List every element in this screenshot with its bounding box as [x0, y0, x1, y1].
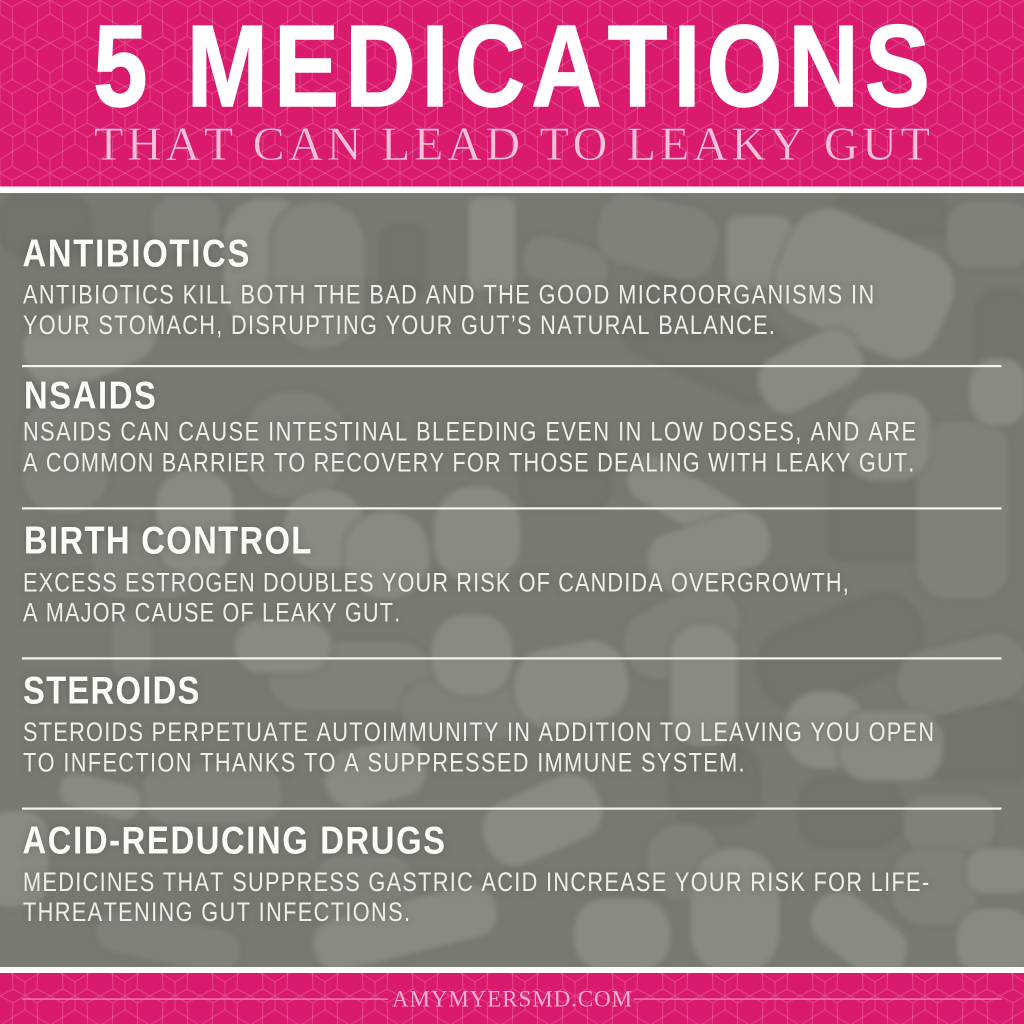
body: nsaids: NSAIDS CAN CAUSE INTESTINAL BLEEDING EVEN IN LOW DOSES, AND ARE [23, 418, 916, 447]
body: birth control: A MAJOR CAUSE OF LEAKY GUT. [23, 599, 400, 628]
heading: antibiotics: ANTIBIOTICS [23, 231, 249, 275]
header banner [0, 0, 1024, 186]
heading: nsaids: NSAIDS [24, 373, 156, 417]
body: antibiotics [23, 280, 874, 341]
body: steroids [23, 718, 934, 778]
section: antibiotics [23, 231, 874, 341]
body: nsaids [23, 418, 916, 478]
subtitle: THAT CAN LEAD TO LEAKY GUT [94, 118, 930, 171]
body: antibiotics: YOUR STOMACH, DISRUPTING YOUR GUT’S NATURAL BALANCE. [23, 311, 775, 341]
body: acid-reducing drugs: THREATENING GUT INFECTIONS. [23, 898, 410, 928]
body: birth control [23, 569, 849, 628]
section: steroids [23, 668, 934, 778]
heading: birth control: BIRTH CONTROL [24, 518, 311, 562]
section: nsaids [23, 373, 916, 478]
body: steroids: TO INFECTION THANKS TO A SUPPRESSED IMMUNE SYSTEM. [23, 749, 745, 778]
heading: steroids: STEROIDS [23, 668, 199, 712]
body: steroids: STEROIDS PERPETUATE AUTOIMMUNITY IN ADDITION TO LEAVING YOU OPEN [23, 718, 934, 748]
body: antibiotics: ANTIBIOTICS KILL BOTH THE BAD AND THE GOOD MICROORGANISMS IN [23, 280, 874, 310]
heading: acid-reducing drugs: ACID-REDUCING DRUGS [23, 818, 445, 862]
footer banner [0, 973, 1024, 1024]
body: acid-reducing drugs [23, 868, 929, 928]
background photo of pills [0, 184, 1024, 992]
title: 5 MEDICATIONS [93, 1, 930, 131]
footer website: AMYMYERSMD.COM [392, 987, 632, 1012]
section: acid-reducing drugs [23, 818, 929, 928]
body: acid-reducing drugs: MEDICINES THAT SUPPRESS GASTRIC ACID INCREASE YOUR RISK FOR LIFE- [23, 868, 929, 898]
body: nsaids: A COMMON BARRIER TO RECOVERY FOR THOSE DEALING WITH LEAKY GUT. [23, 449, 914, 478]
section: birth control [23, 518, 849, 628]
body: birth control: EXCESS ESTROGEN DOUBLES YOUR RISK OF CANDIDA OVERGROWTH, [23, 569, 849, 598]
